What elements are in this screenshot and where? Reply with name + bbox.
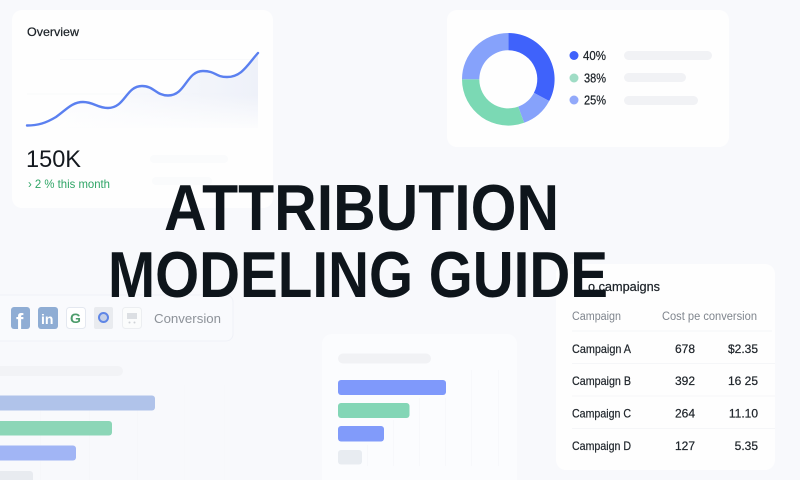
panel: overview card — [12, 10, 273, 208]
legend: 40% — [570, 49, 712, 63]
table row: Campaign A: Campaign A — [572, 342, 631, 356]
table header: Campaign — [572, 311, 621, 323]
table row: Campaign A: $2.35 — [728, 342, 758, 356]
chart: left bars — [0, 366, 224, 480]
title: MODELING GUIDE — [108, 238, 608, 311]
chart: overview line — [27, 53, 258, 126]
legend: 40%: 40% — [583, 49, 606, 63]
table row: Campaign D: 127 — [675, 439, 695, 453]
panel: middle bars card — [322, 334, 517, 480]
label: conversion: Conversion — [154, 312, 221, 326]
table row: Campaign C: 264 — [675, 406, 695, 420]
title: ATTRIBUTION — [164, 171, 559, 244]
panel: channel path — [0, 295, 233, 341]
table row: Campaign C: 11.10 — [729, 406, 758, 420]
icon: google: G — [70, 310, 81, 326]
table row: Campaign B: Campaign B — [572, 374, 631, 388]
bar: periwinkle — [338, 426, 384, 442]
icon: linkedin: in — [41, 311, 53, 327]
table row: Campaign B — [572, 374, 758, 388]
metric: monthly change: › 2 % this month — [28, 177, 110, 191]
chart: area under line — [27, 53, 258, 128]
legend: 38%: 38% — [584, 72, 606, 86]
icon: cart — [122, 308, 142, 328]
heading: overview: Overview — [27, 25, 79, 39]
heading: top campaigns: o.campaigns — [588, 279, 660, 294]
icon: analytics — [94, 307, 113, 329]
icon: google — [66, 308, 86, 328]
table row: Campaign B: 392 — [675, 374, 695, 388]
panel: donut card — [447, 10, 729, 147]
table row: Campaign D — [572, 439, 758, 453]
legend: 25%: 25% — [584, 94, 606, 108]
icon: facebook — [11, 307, 30, 334]
bar: blue — [338, 380, 446, 395]
metric: 150K: 150K — [26, 146, 81, 173]
title — [108, 171, 608, 311]
table row: Campaign B: 16 25 — [728, 374, 758, 388]
table row: Campaign D: 5.35 — [735, 439, 758, 453]
icon: linkedin — [38, 307, 58, 329]
bar: green — [338, 403, 410, 418]
chart: donut — [462, 33, 555, 126]
table row: Campaign C — [572, 406, 758, 420]
table row: Campaign A: 678 — [675, 342, 695, 356]
table header — [572, 311, 757, 323]
legend: 25% — [570, 94, 698, 108]
table row: Campaign C: Campaign C — [572, 406, 631, 420]
icon: facebook: f — [16, 309, 24, 334]
table row: Campaign D: Campaign D — [572, 439, 631, 453]
table row: Campaign A — [572, 342, 758, 356]
table header: Cost pe conversion — [662, 311, 757, 323]
bar: grey — [338, 450, 362, 464]
panel: top campaigns table — [556, 264, 775, 470]
legend: 38% — [570, 72, 686, 86]
